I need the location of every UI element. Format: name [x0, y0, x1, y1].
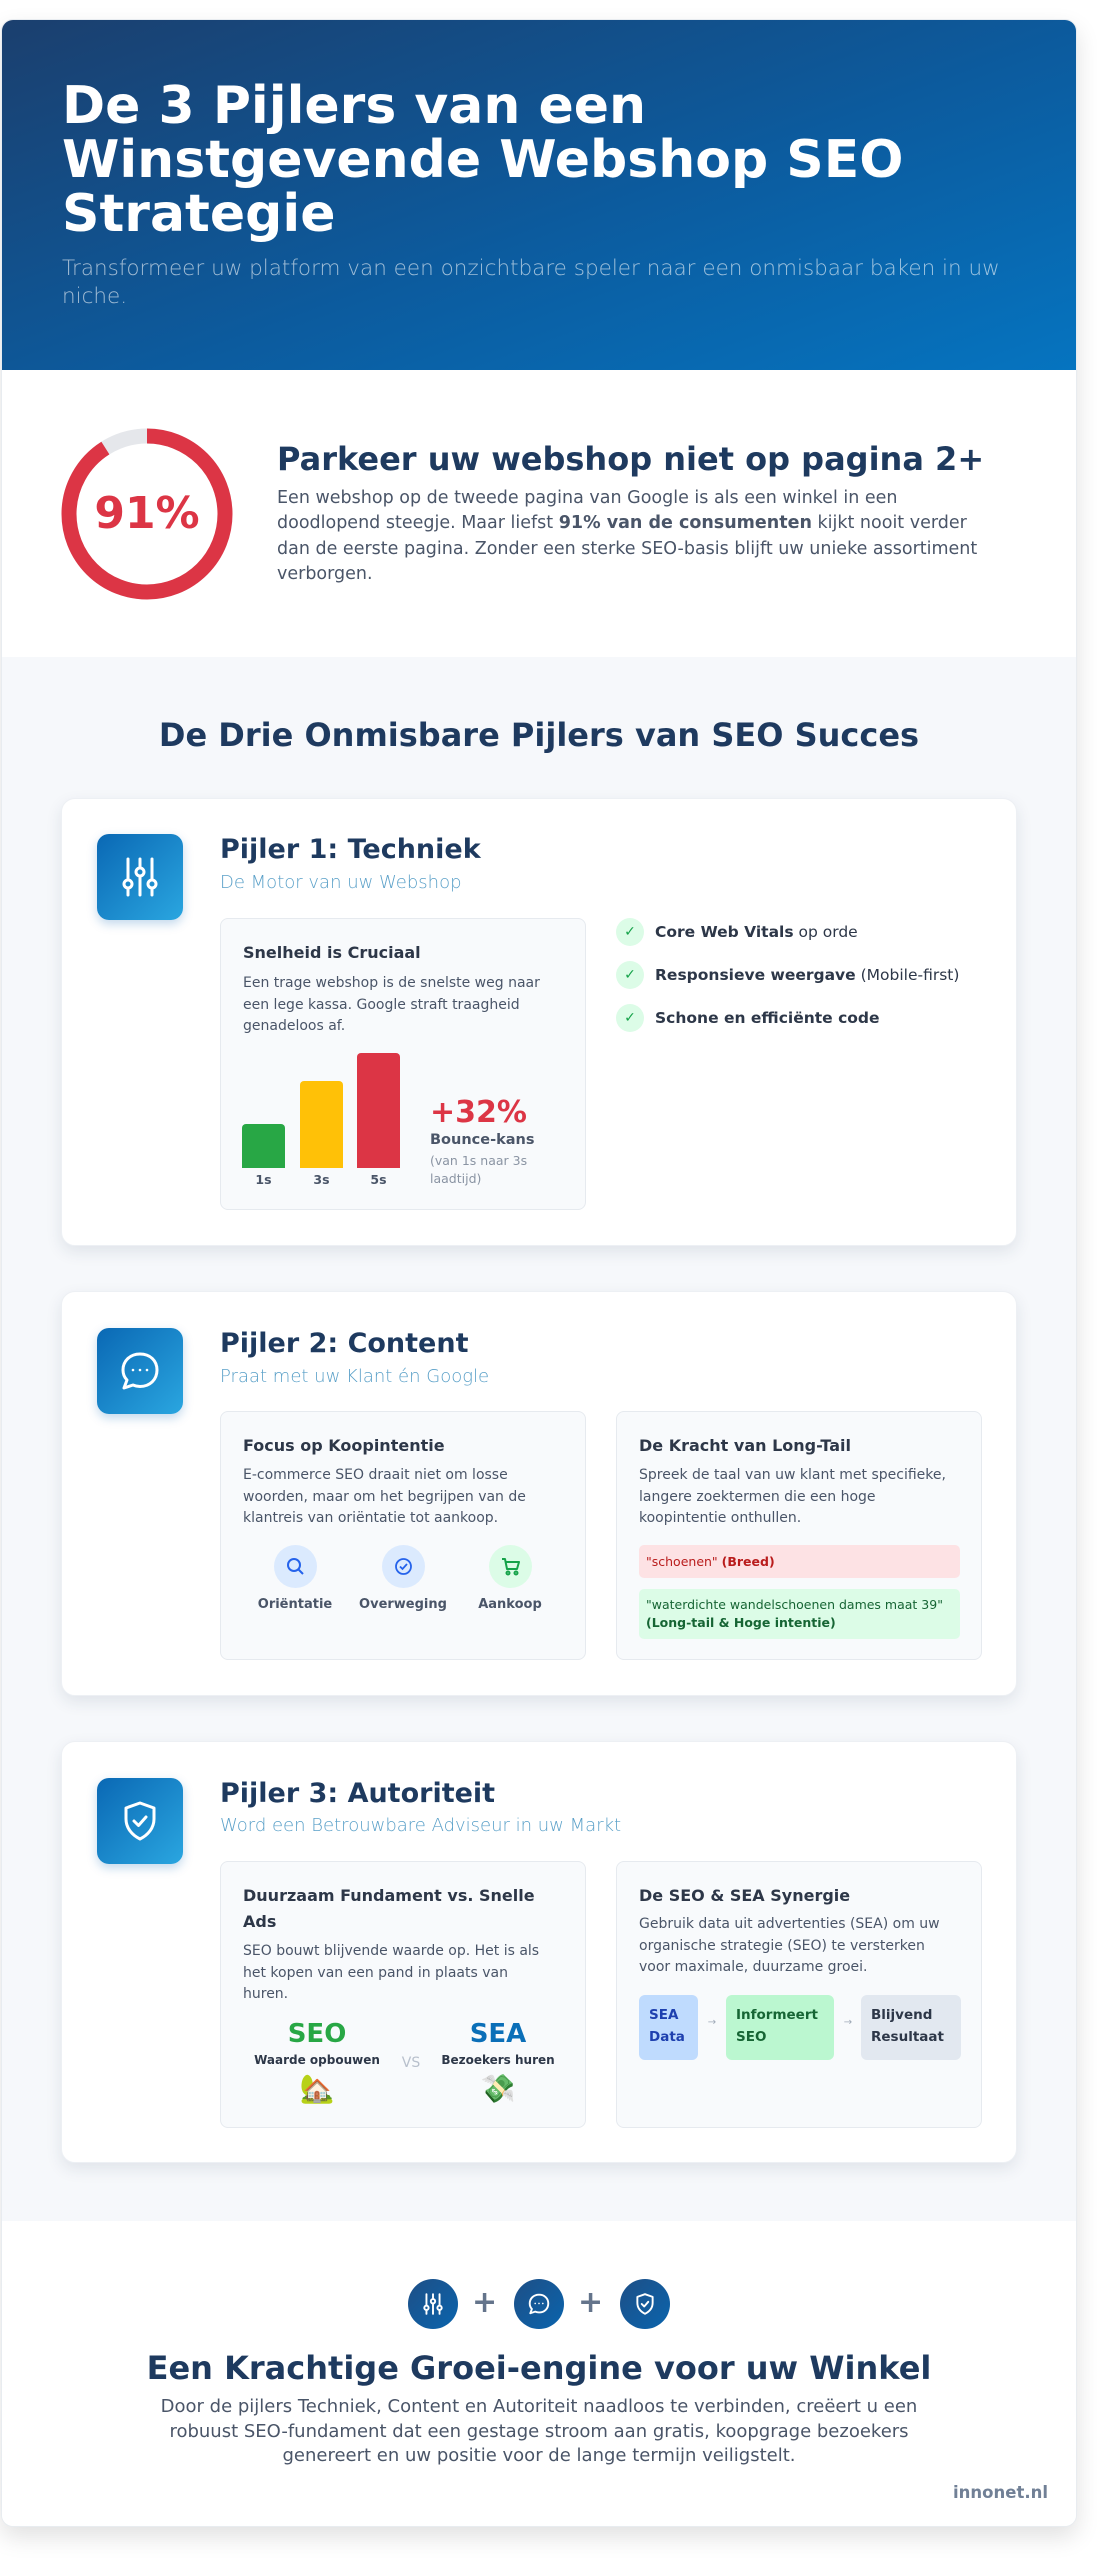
icon: shield	[97, 1778, 183, 1864]
pillars section background	[2, 657, 1078, 2221]
footer heading: Een Krachtige Groei-engine voor uw Winkel	[147, 2349, 931, 2387]
subheading: Word een Betrouwbare Adviseur in uw Markt	[220, 1815, 621, 1836]
title: Winstgevende Webshop SEO	[62, 130, 903, 190]
brand: innonet.nl	[953, 2483, 1048, 2502]
checklist: Schone en efficiënte code	[655, 1009, 880, 1027]
SEO vs SEA comparison: Waarde opbouwen	[254, 2053, 380, 2067]
keyword: broad	[639, 1545, 960, 1578]
footer section	[2, 2221, 1078, 2528]
keyword: long-tail: "waterdichte wandelschoenen dames maat 39"	[646, 1597, 943, 1612]
subheading: De Motor van uw Webshop	[220, 872, 462, 893]
flow diagram: →	[708, 2017, 716, 2028]
donut chart 91%	[62, 428, 232, 600]
box text: Gebruik data uit advertenties (SEA) om uw	[639, 1916, 940, 1932]
icon: chat bubble	[97, 1328, 183, 1414]
card: pijler 1 techniek	[61, 798, 1017, 1246]
box text: het kopen van een pand in plaats van	[243, 1965, 508, 1981]
box text: Een trage webshop is de snelste weg naar	[243, 975, 540, 991]
checklist: ✓	[624, 924, 636, 940]
box text	[243, 1467, 526, 1526]
customer journey icons: Oriëntatie	[258, 1597, 332, 1612]
keyword: broad: "schoenen" (Breed)	[646, 1554, 775, 1569]
flow diagram: Data	[649, 2029, 685, 2045]
checklist: Core Web Vitals op orde	[655, 923, 858, 941]
heading: Pijler 2: Content	[220, 1328, 468, 1359]
stat heading: Parkeer uw webshop niet op pagina 2+	[277, 440, 984, 478]
title: Strategie	[62, 184, 335, 244]
footer icons row	[408, 2279, 670, 2329]
stat +32%: +32%	[430, 1095, 527, 1130]
card: pijler 2 content	[61, 1291, 1017, 1696]
keyword: long-tail: (Long-tail & Hoge intentie)	[646, 1615, 836, 1630]
SEO vs SEA comparison: SEA	[470, 2019, 526, 2049]
box text: koopintentie onthullen.	[639, 1510, 801, 1526]
box text: SEO bouwt blijvende waarde op. Het is als	[243, 1943, 539, 1959]
donut chart 91%: 91%	[94, 488, 200, 539]
box title: De Kracht van Long-Tail	[639, 1436, 851, 1455]
SEO vs SEA comparison: VS	[402, 2055, 420, 2071]
bar chart: 3s	[313, 1172, 330, 1187]
box text: genadeloos af.	[243, 1018, 345, 1034]
box: seo sea synergie	[616, 1861, 982, 2128]
footer icons row: +	[472, 2285, 497, 2320]
box text	[243, 975, 540, 1034]
checklist: ✓	[624, 1010, 636, 1026]
stat +32%: Bounce-kans	[430, 1132, 534, 1148]
box text: organische strategie (SEO) te versterken	[639, 1938, 925, 1954]
stat +32%: laadtijd)	[430, 1171, 481, 1186]
SEO vs SEA comparison: SEO	[288, 2019, 346, 2049]
flow diagram: Resultaat	[871, 2029, 944, 2045]
footer paragraph: genereert en uw positie voor de lange termijn veiligstelt.	[282, 2445, 796, 2466]
subheading: Praat met uw Klant én Google	[220, 1366, 489, 1387]
bar chart	[242, 1053, 400, 1187]
box text	[639, 1467, 946, 1526]
checklist: Responsieve weergave (Mobile-first)	[655, 966, 959, 984]
title	[62, 76, 903, 244]
customer journey icons: Aankoop	[478, 1597, 542, 1612]
customer journey icons	[258, 1545, 542, 1612]
box: snelheid	[220, 918, 586, 1210]
box text: langere zoektermen die een hoge	[639, 1489, 876, 1505]
footer paragraph: Door de pijlers Techniek, Content en Autoriteit naadloos te verbinden, creëert u een	[161, 2396, 917, 2417]
box text	[639, 1916, 940, 1975]
section heading: De Drie Onmisbare Pijlers van SEO Succes	[159, 716, 919, 754]
box text: voor maximale, duurzame groei.	[639, 1959, 868, 1975]
footer paragraph	[161, 2396, 917, 2466]
flow diagram: SEA	[649, 2007, 678, 2023]
subtitle: niche.	[62, 284, 127, 309]
flow diagram: Blijvend	[871, 2007, 932, 2023]
checklist: ✓	[624, 967, 636, 983]
SEO vs SEA comparison: Bezoekers huren	[441, 2053, 555, 2067]
stat section	[2, 370, 1078, 657]
header	[2, 20, 1078, 370]
bar chart: 5s	[370, 1172, 387, 1187]
box: fundament vs ads	[220, 1861, 586, 2128]
flow diagram: SEO	[736, 2029, 766, 2045]
subtitle: Transformeer uw platform van een onzichtbare speler naar een onmisbaar baken in uw	[62, 256, 1000, 281]
flow diagram	[639, 1995, 961, 2060]
stat paragraph: dan de eerste pagina. Zonder een sterke SEO-basis blijft uw unieke assortiment	[277, 539, 977, 559]
box: koopintentie	[220, 1411, 586, 1660]
customer journey icons: Overweging	[359, 1597, 447, 1612]
stat paragraph: doodlopend steegje. Maar liefst 91% van de consumenten kijkt nooit verder	[277, 513, 967, 533]
box text: E-commerce SEO draait niet om losse	[243, 1467, 508, 1483]
box text: Spreek de taal van uw klant met specifieke,	[639, 1467, 946, 1483]
title: De 3 Pijlers van een	[62, 76, 646, 136]
box text: huren.	[243, 1986, 288, 2002]
box title: Ads	[243, 1912, 276, 1930]
box text	[243, 1943, 539, 2002]
keyword: long-tail	[639, 1589, 960, 1639]
card: pijler 3 autoriteit	[61, 1741, 1017, 2163]
flow diagram: →	[844, 2017, 852, 2028]
stat paragraph: verborgen.	[277, 564, 373, 584]
bar chart: 1s	[255, 1172, 272, 1187]
stat +32%	[430, 1095, 534, 1186]
box title: De SEO & SEA Synergie	[639, 1886, 850, 1905]
heading: Pijler 1: Techniek	[220, 834, 481, 865]
box title: Snelheid is Cruciaal	[243, 943, 421, 962]
box title	[243, 1886, 535, 1930]
stat paragraph: Een webshop op de tweede pagina van Google is als een winkel in een	[277, 488, 898, 508]
box text: woorden, maar om het begrijpen van de	[243, 1489, 526, 1505]
flow diagram: Informeert	[736, 2007, 818, 2023]
footer paragraph: robuust SEO-fundament dat een gestage stroom aan gratis, koopgrage bezoekers	[169, 2420, 909, 2442]
SEO vs SEA comparison	[254, 2019, 555, 2105]
stat +32%: (van 1s naar 3s	[430, 1153, 527, 1168]
heading: Pijler 3: Autoriteit	[220, 1778, 495, 1809]
box text: een lege kassa. Google straft traagheid	[243, 997, 520, 1013]
box text: klantreis van oriëntatie tot aankoop.	[243, 1510, 498, 1526]
footer icons row: +	[578, 2285, 603, 2320]
stat paragraph	[277, 488, 977, 584]
checklist	[616, 918, 959, 1032]
icon: sliders	[97, 834, 183, 920]
SEO vs SEA comparison: 🏡	[300, 2072, 334, 2105]
subtitle	[62, 256, 1000, 309]
box title: Focus op Koopintentie	[243, 1436, 445, 1455]
box: long-tail	[616, 1411, 982, 1660]
SEO vs SEA comparison: 💸	[481, 2072, 515, 2105]
box title: Duurzaam Fundament vs. Snelle	[243, 1886, 535, 1905]
